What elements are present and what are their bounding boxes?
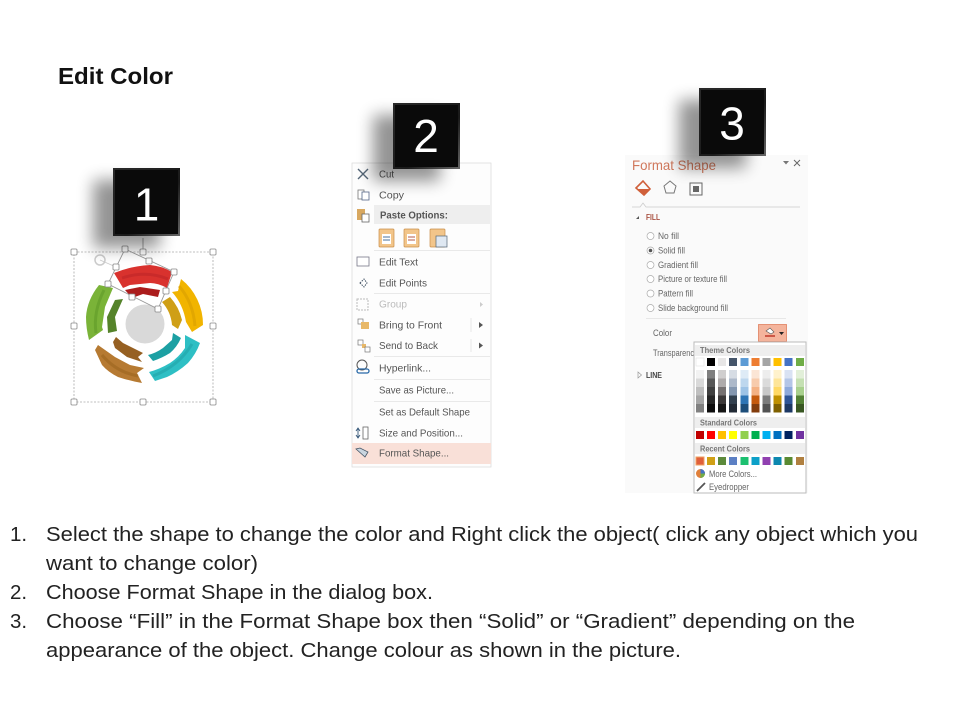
- color palette dropdown: Theme Colors: [700, 345, 750, 355]
- more colors: [696, 469, 757, 479]
- rotated selection frame: [71, 238, 216, 405]
- color control: Transparenc: [653, 348, 694, 358]
- icon: circular diagram: [86, 265, 203, 383]
- menu items: Edit Text: [379, 256, 418, 268]
- panel: format shape: [625, 155, 808, 493]
- instructions text: Choose Format Shape in the dialog box.: [46, 581, 433, 604]
- instructions text: appearance of the object. Change colour as shown in the picture.: [46, 639, 681, 662]
- menu items: Size and Position...: [379, 428, 463, 440]
- theme colors: [696, 358, 804, 366]
- standard colors: [696, 431, 804, 439]
- panel heading: Format Shape: [632, 157, 716, 173]
- step badge 1: 1: [134, 178, 159, 230]
- panel controls: [783, 160, 800, 166]
- instructions text: Choose “Fill” in the Format Shape box then “Solid” or “Gradient” depending on the: [46, 610, 855, 633]
- menu items: Hyperlink...: [379, 362, 431, 374]
- fill section: Pattern fill: [658, 288, 693, 298]
- instructions text: 3.: [10, 610, 27, 633]
- step badge 3: [679, 88, 766, 168]
- line section: LINE: [646, 371, 663, 380]
- color control: Color: [653, 328, 672, 338]
- step badge 1: [93, 168, 180, 248]
- color palette dropdown: Standard Colors: [700, 418, 757, 428]
- selection frame: [74, 252, 213, 402]
- menu items: Cut: [379, 168, 394, 180]
- menu items: Group: [379, 298, 407, 310]
- menu icons: [356, 169, 483, 457]
- fill section: Solid fill: [658, 246, 685, 256]
- step badge 3: 3: [719, 98, 745, 150]
- fill section: [636, 213, 786, 318]
- title: Edit Color: [58, 63, 173, 89]
- eyedropper: Eyedropper: [709, 482, 749, 492]
- menu items: [379, 168, 470, 460]
- fill section: Picture or texture fill: [658, 274, 727, 284]
- theme shades: [696, 370, 804, 412]
- menu items: Edit Points: [379, 278, 427, 290]
- color control: [653, 324, 786, 358]
- fill section: FILL: [646, 213, 660, 222]
- menu items: Save as Picture...: [379, 384, 454, 396]
- menu items: Format Shape...: [379, 448, 449, 460]
- menu items: Copy: [379, 190, 405, 202]
- menu items: Bring to Front: [379, 320, 442, 332]
- more colors: More Colors...: [709, 469, 757, 479]
- panel: context menu: [352, 163, 491, 467]
- instructions text: [10, 523, 918, 662]
- step badge 2: 2: [413, 110, 439, 162]
- fill section: Slide background fill: [658, 303, 728, 313]
- step badge 2: [373, 103, 460, 181]
- color palette dropdown: [694, 342, 806, 493]
- instructions text: want to change color): [45, 552, 258, 575]
- fill section: Gradient fill: [658, 260, 698, 270]
- fill section: No fill: [658, 231, 679, 241]
- instructions text: 2.: [10, 581, 27, 604]
- line section: [638, 371, 663, 380]
- recent colors: [696, 457, 804, 465]
- instructions text: Select the shape to change the color and Right click the object( click any object which you: [46, 523, 918, 546]
- panel: step 1 shape selection: [71, 238, 216, 405]
- instructions text: 1.: [10, 523, 27, 546]
- color palette dropdown: Recent Colors: [700, 444, 750, 454]
- menu items: Send to Back: [379, 340, 439, 352]
- icon: fill tabs: [632, 181, 800, 207]
- eyedropper: [697, 482, 749, 492]
- menu items: Set as Default Shape: [379, 406, 470, 418]
- menu items: Paste Options:: [380, 210, 448, 222]
